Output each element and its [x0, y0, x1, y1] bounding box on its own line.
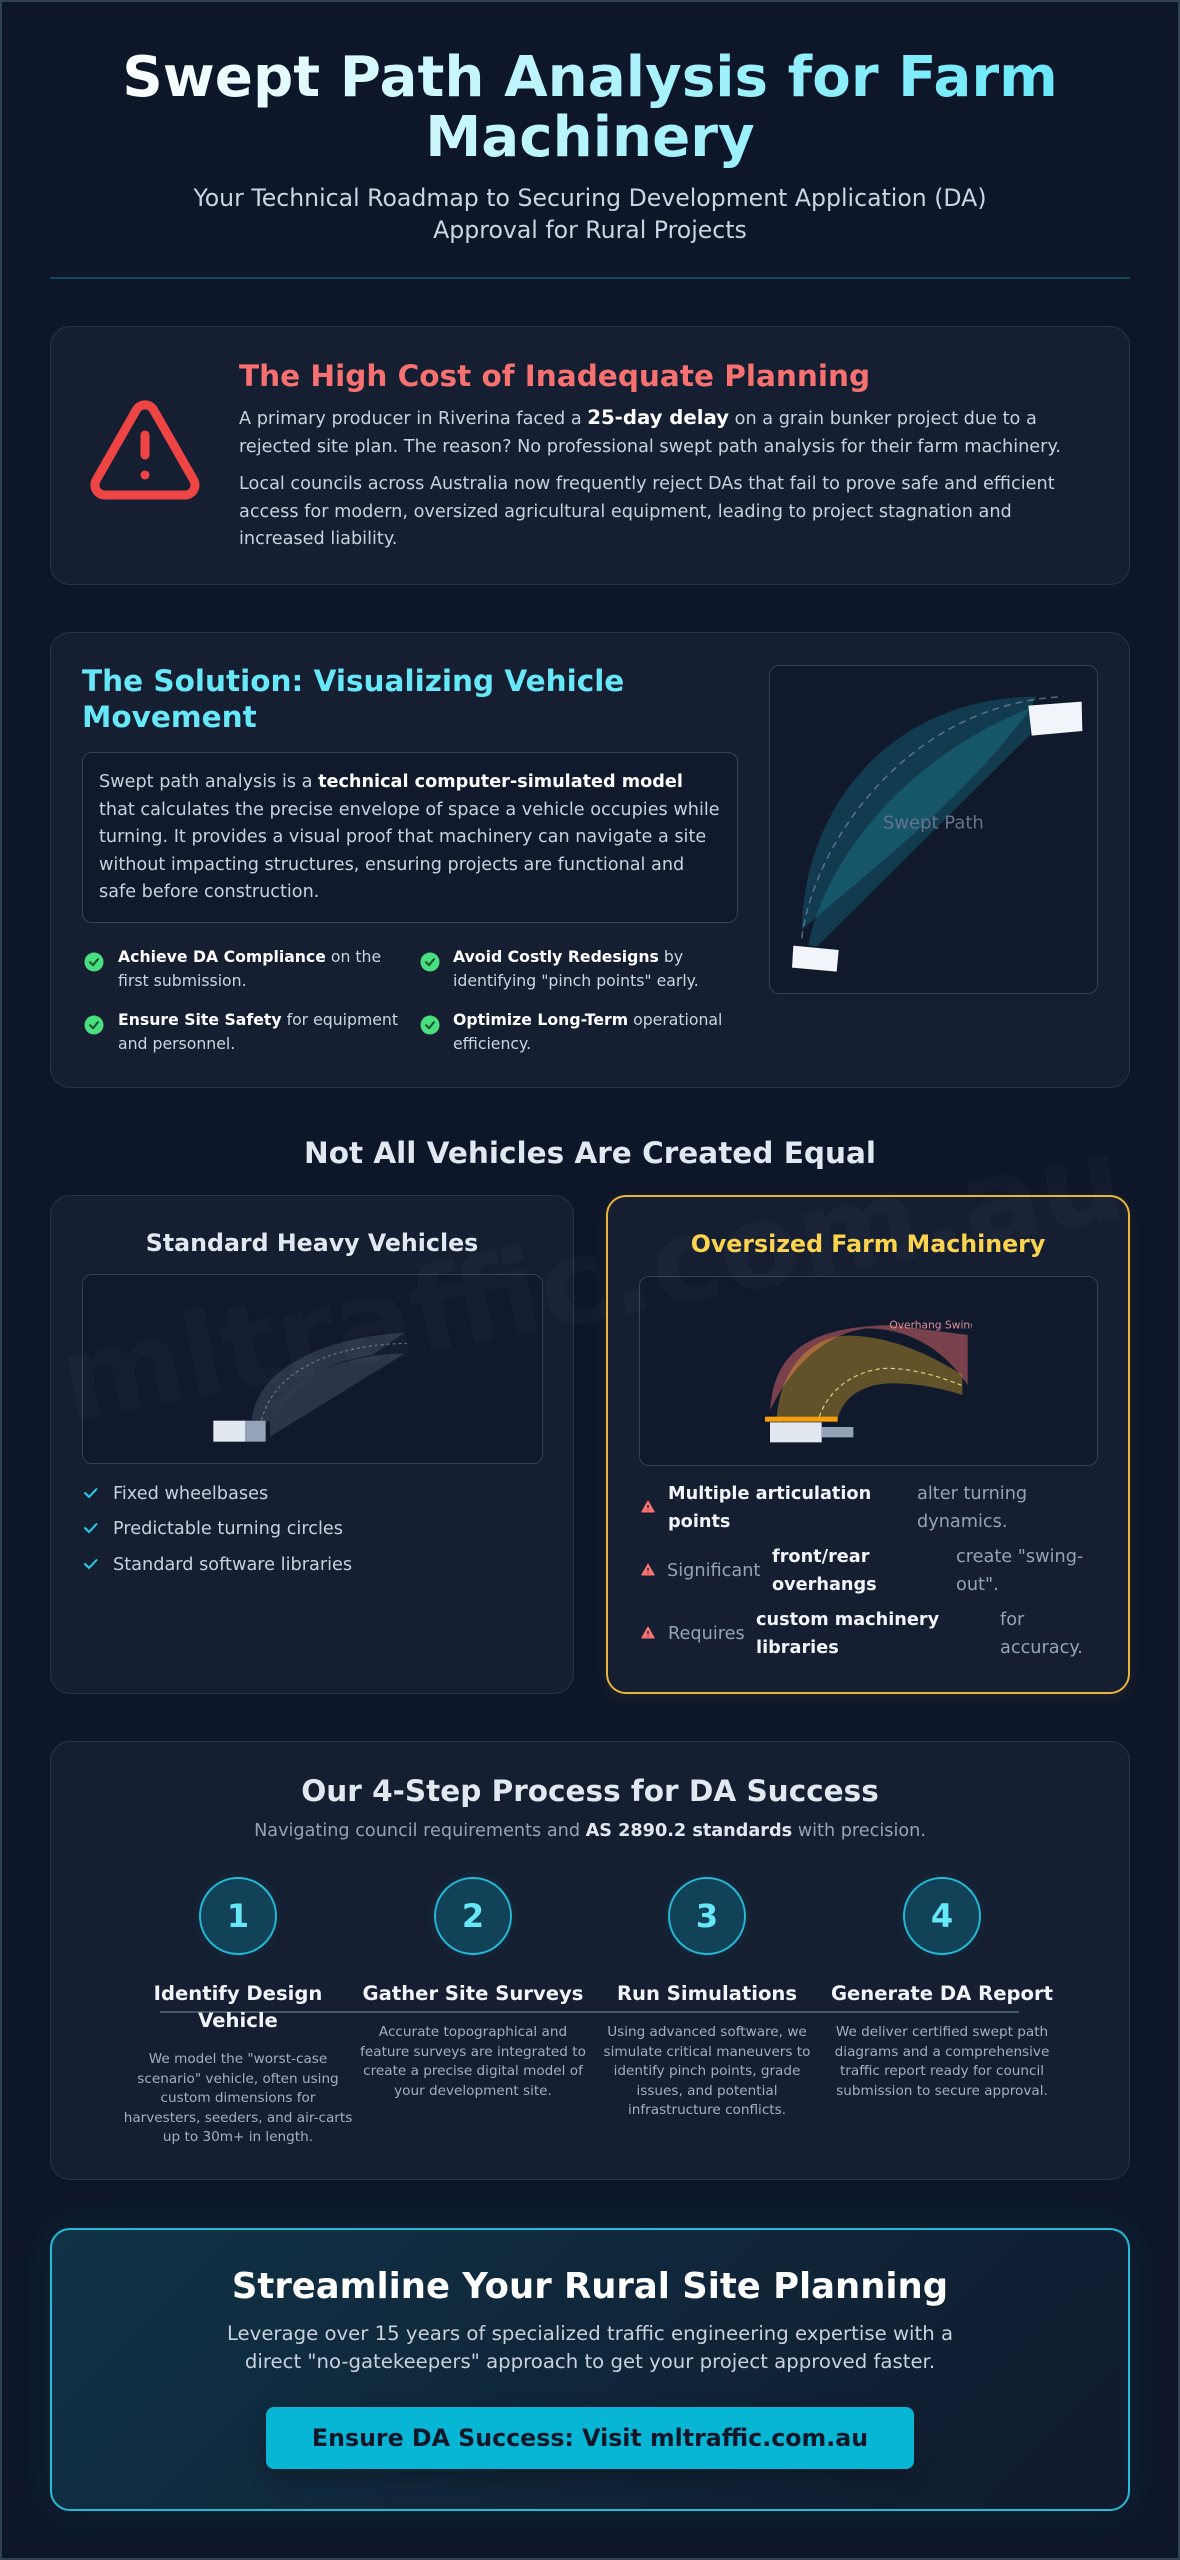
- panel: the solution: [50, 632, 1130, 1088]
- list item: articulation points: points: [668, 1512, 730, 1532]
- process subtitle: Navigating council requirements and AS 2890.2 standards with precision.: [254, 1821, 926, 1841]
- definition text: [99, 772, 720, 902]
- panel: oversized farm machinery: [606, 1195, 1130, 1694]
- benefit: site safety: [84, 1010, 398, 1053]
- benefit: long-term efficiency: efficiency.: [453, 1034, 531, 1053]
- step title: [154, 1982, 322, 2032]
- list item: articulation points: dynamics.: [917, 1512, 1007, 1532]
- step text: issues, and potential: [636, 2083, 778, 2099]
- paragraph: delay story: rejected site plan. The reason? No professional swept path analysis for their farm machinery.: [239, 437, 1061, 457]
- step title: Identify Design: [154, 1982, 322, 2005]
- definition text: that calculates the precise envelope of space a vehicle occupies while: [99, 800, 720, 820]
- benefit: site safety: and personnel.: [118, 1034, 235, 1053]
- step text: your development site.: [394, 2083, 552, 2099]
- paragraph: council rejections: increased liability.: [239, 529, 397, 549]
- step text: diagrams and a comprehensive: [835, 2044, 1049, 2060]
- icon: warning triangle: [90, 400, 200, 500]
- paragraph: council rejections: access for modern, oversized agricultural equipment, leading to project stagnation and: [239, 502, 1012, 522]
- list item: articulation points: [641, 1484, 1027, 1532]
- list item: custom libraries: Requires: [668, 1624, 745, 1644]
- definition text: without impacting structures, ensuring projects are functional and: [99, 855, 684, 875]
- step title: Generate DA Report: [831, 1982, 1053, 2005]
- chart: swept path curve: [792, 696, 1082, 972]
- step number 1: 1: [227, 1897, 249, 1935]
- step text: We model the "worst-case: [149, 2051, 327, 2067]
- heading: standard: Standard Heavy Vehicles: [146, 1229, 478, 1257]
- heading: process: Our 4-Step Process for DA Success: [301, 1774, 879, 1808]
- diagram panel: swept path: [769, 665, 1098, 994]
- paragraph: council rejections: [239, 474, 1055, 549]
- step number 4: [903, 1877, 981, 1955]
- benefit: long-term efficiency: Optimize Long-Term operational: [453, 1010, 722, 1029]
- watermark: mltraffic.com.au: [50, 1109, 1134, 1450]
- benefit: DA compliance: [84, 947, 381, 990]
- list item: overhangs: Significant: [667, 1561, 760, 1581]
- step 4: [831, 1877, 1053, 2099]
- list item: custom libraries: accuracy.: [1000, 1638, 1083, 1658]
- list item: overhangs: front/rear: [772, 1547, 869, 1567]
- step text: [604, 2024, 810, 2118]
- step number 2: 2: [462, 1897, 484, 1935]
- benefit: long-term efficiency: [420, 1010, 722, 1053]
- panel: high cost of inadequate planning: [50, 326, 1130, 585]
- step 3: [604, 1877, 810, 2118]
- call to action text: [227, 2322, 953, 2373]
- benefit: avoid redesigns: identifying "pinch points" early.: [453, 971, 699, 990]
- section heading: vehicle comparison: Not All Vehicles Are Created Equal: [304, 1136, 876, 1170]
- heading: the solution: Movement: [82, 700, 257, 734]
- list item: articulation points: Multiple articulation: [668, 1484, 871, 1504]
- benefit: avoid redesigns: [420, 947, 699, 990]
- panel: 4-step process: [50, 1741, 1130, 2180]
- definition text: Swept path analysis is a technical computer-simulated model: [99, 772, 683, 792]
- step text: simulate critical maneuvers to: [604, 2044, 810, 2060]
- step text: feature surveys are integrated to: [360, 2044, 586, 2060]
- heading: the solution: [82, 664, 624, 734]
- step number 3: 3: [696, 1897, 718, 1935]
- process connector line: [160, 2011, 1019, 2013]
- step text: scenario" vehicle, often using: [137, 2071, 339, 2087]
- list item: articulation points: alter turning: [917, 1484, 1027, 1504]
- step title: Run Simulations: [617, 1982, 797, 2005]
- diagram: standard vehicle: [82, 1274, 543, 1464]
- title: Swept Path Analysis for Farm: [122, 45, 1058, 110]
- diagram: oversized machine: [639, 1276, 1098, 1466]
- subtitle: [193, 184, 987, 244]
- heading: high cost: The High Cost of Inadequate Planning: [239, 359, 870, 393]
- chart: swept path curve: Swept Path: [883, 813, 984, 834]
- step text: harvesters, seeders, and air-carts: [124, 2110, 352, 2126]
- panel: standard heavy vehicles: [50, 1195, 574, 1694]
- step text: up to 30m+ in length.: [163, 2129, 313, 2145]
- list item: overhangs: [641, 1547, 1083, 1594]
- step text: Using advanced software, we: [607, 2024, 807, 2040]
- benefit: site safety: Ensure Site Safety for equipment: [118, 1010, 398, 1029]
- header: [50, 45, 1130, 279]
- benefit: avoid redesigns: Avoid Costly Redesigns by: [453, 947, 683, 966]
- definition text: turning. It provides a visual proof that machinery can navigate a site: [99, 827, 706, 847]
- button: visit site: Ensure DA Success: Visit mltraffic.com.au: [312, 2424, 868, 2452]
- step number 1: [199, 1877, 277, 1955]
- list: standard features: Fixed wheelbases: [113, 1484, 268, 1504]
- step text: identify pinch points, grade: [614, 2063, 800, 2079]
- header divider: [50, 277, 1130, 279]
- list item: custom libraries: [641, 1610, 1083, 1658]
- step text: infrastructure conflicts.: [628, 2102, 786, 2118]
- step number 3: [668, 1877, 746, 1955]
- benefit: DA compliance: first submission.: [118, 971, 247, 990]
- step text: [124, 2051, 352, 2145]
- list item: overhangs: out".: [956, 1574, 999, 1594]
- step text: [360, 2024, 586, 2099]
- step 2: [360, 1877, 586, 2099]
- heading: oversized: Oversized Farm Machinery: [691, 1230, 1045, 1258]
- diagram: oversized machine: Overhang Swing: [889, 1319, 977, 1332]
- subtitle: Your Technical Roadmap to Securing Development Application (DA): [193, 184, 987, 212]
- list item: overhangs: overhangs: [772, 1574, 877, 1594]
- list: standard features: Predictable turning circles: [113, 1519, 343, 1539]
- subtitle: Approval for Rural Projects: [433, 216, 747, 244]
- call to action text: direct "no-gatekeepers" approach to get your project approved faster.: [245, 2350, 935, 2373]
- heading: call to action: Streamline Your Rural Site Planning: [232, 2266, 948, 2307]
- step text: [835, 2024, 1049, 2099]
- step text: submission to secure approval.: [836, 2083, 1048, 2099]
- step text: Accurate topographical and: [379, 2024, 567, 2040]
- step text: We deliver certified swept path: [836, 2024, 1048, 2040]
- list: standard features: Standard software libraries: [113, 1555, 352, 1575]
- panel: call to action: [50, 2228, 1130, 2511]
- list item: custom libraries: for: [1000, 1610, 1024, 1630]
- button: visit site: [266, 2407, 914, 2469]
- paragraph: council rejections: Local councils across Australia now frequently reject DAs that fail to prove safe and efficient: [239, 474, 1055, 494]
- paragraph: delay story: A primary producer in Riverina faced a 25-day delay on a grain bunker project due to a: [239, 406, 1037, 429]
- step number 4: 4: [931, 1897, 953, 1935]
- title: Machinery: [425, 105, 755, 170]
- definition text: safe before construction.: [99, 882, 319, 902]
- list item: custom libraries: custom machinery: [756, 1610, 939, 1630]
- definition box: [82, 752, 738, 923]
- paragraph: delay story: [239, 406, 1061, 457]
- step number 2: [434, 1877, 512, 1955]
- step title: Gather Site Surveys: [363, 1982, 583, 2005]
- step text: traffic report ready for council: [840, 2063, 1044, 2079]
- title: [110, 48, 1070, 168]
- heading: the solution: The Solution: Visualizing Vehicle: [82, 664, 624, 698]
- step text: create a precise digital model of: [363, 2063, 583, 2079]
- step text: custom dimensions for: [161, 2090, 315, 2106]
- step title: Vehicle: [198, 2009, 278, 2032]
- call to action text: Leverage over 15 years of specialized traffic engineering expertise with a: [227, 2322, 953, 2345]
- step 1: [124, 1877, 352, 2145]
- benefit: DA compliance: Achieve DA Compliance on the: [118, 947, 381, 966]
- list item: overhangs: create "swing-: [956, 1547, 1083, 1567]
- list: standard features: [84, 1484, 352, 1575]
- list item: custom libraries: libraries: [756, 1638, 839, 1658]
